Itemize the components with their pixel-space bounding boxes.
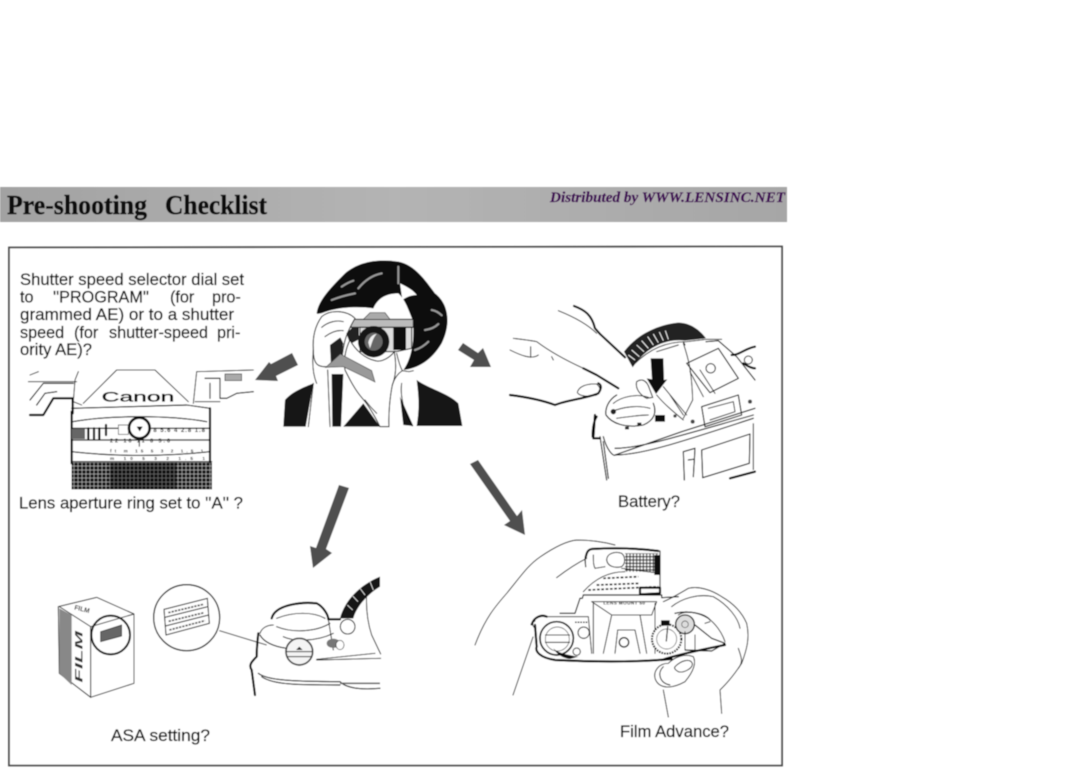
camera top view [272,603,340,619]
right hand [344,340,396,427]
camera top [606,395,655,426]
camera top [560,595,678,613]
box label: FILM [74,604,91,615]
thumb [655,655,695,717]
illustration: lens aperture ring: m 10 5 3 2 1.5 1 [110,456,205,461]
rewind knob [540,622,573,655]
illustration: film advance: LENS MOUNT 50 [603,600,645,605]
illustration: ASA dial on camera [154,577,381,695]
right hand [663,588,748,713]
highlight circle [129,418,150,438]
pointer arrow [647,358,667,394]
left hand arm [475,540,615,695]
arrow: to ASA setting [310,485,349,568]
text: shutter speed question: pri- [217,324,240,342]
text: shutter speed question: Shutter speed selector dial set [20,271,245,289]
text: shutter speed question [20,271,245,359]
text: shutter speed question: ''PROGRAM'' [53,288,149,306]
infographic content [0,187,787,766]
text: shutter speed question: to [20,288,34,306]
panel: checklist frame [9,246,782,766]
text: shutter speed question: pro- [212,288,241,306]
illustration: film box [58,597,134,697]
illustration: lens aperture ring: 22 16 11 8 5.6 [110,439,170,445]
illustration: photographer with camera [283,260,462,427]
lens barrel [586,548,658,558]
arrow: to shutter dial [255,353,298,381]
text: shutter speed question: shutter-speed [109,324,208,342]
arrow: to film advance [470,460,525,535]
distributor credit: Distributed by WWW.LENSINC.NET [549,190,786,206]
text: shutter speed question: grammed AE) or to a shutter [20,306,235,324]
header band [0,187,787,222]
lapel [332,374,380,427]
brand name: Canon [102,389,174,404]
illustration: film box: FILM [74,630,86,683]
illustration: battery check [510,306,755,480]
text: shutter speed question: (for [74,324,99,342]
wrist strap [326,354,375,382]
camera body [360,327,412,352]
title: Checklist [165,190,267,220]
illustration: film advance [475,540,748,717]
title: Pre-shooting [7,190,147,220]
text: shutter speed question: speed [20,324,64,342]
shutter dial [652,624,681,654]
caption: battery: Battery? [618,493,680,511]
lens [358,326,389,357]
camera top plate [351,319,413,327]
caption: film advance: Film Advance? [620,723,729,741]
jacket right [417,380,462,426]
illustration: lens aperture ring [28,370,253,489]
left hand [313,312,355,367]
dial knurling [624,323,706,367]
hot shoe [687,341,755,393]
scale marks: 8 5.6 4 2.8 1.8 [153,428,206,434]
back door window [683,434,750,480]
illustration: lens aperture ring: ft m 15 5 3 2 1.5 1 [110,449,204,454]
caption: lens aperture: Lens aperture ring set to ''A'' ? [19,494,243,512]
jacket left [283,383,313,427]
text: shutter speed question: (for [170,288,195,306]
fingers [574,306,625,357]
arrow: to battery [458,343,491,367]
caption: ASA setting: ASA setting? [111,727,210,745]
text: shutter speed question: ority AE)? [20,341,92,359]
eyepiece [702,395,742,427]
magnifier circle [154,585,220,651]
